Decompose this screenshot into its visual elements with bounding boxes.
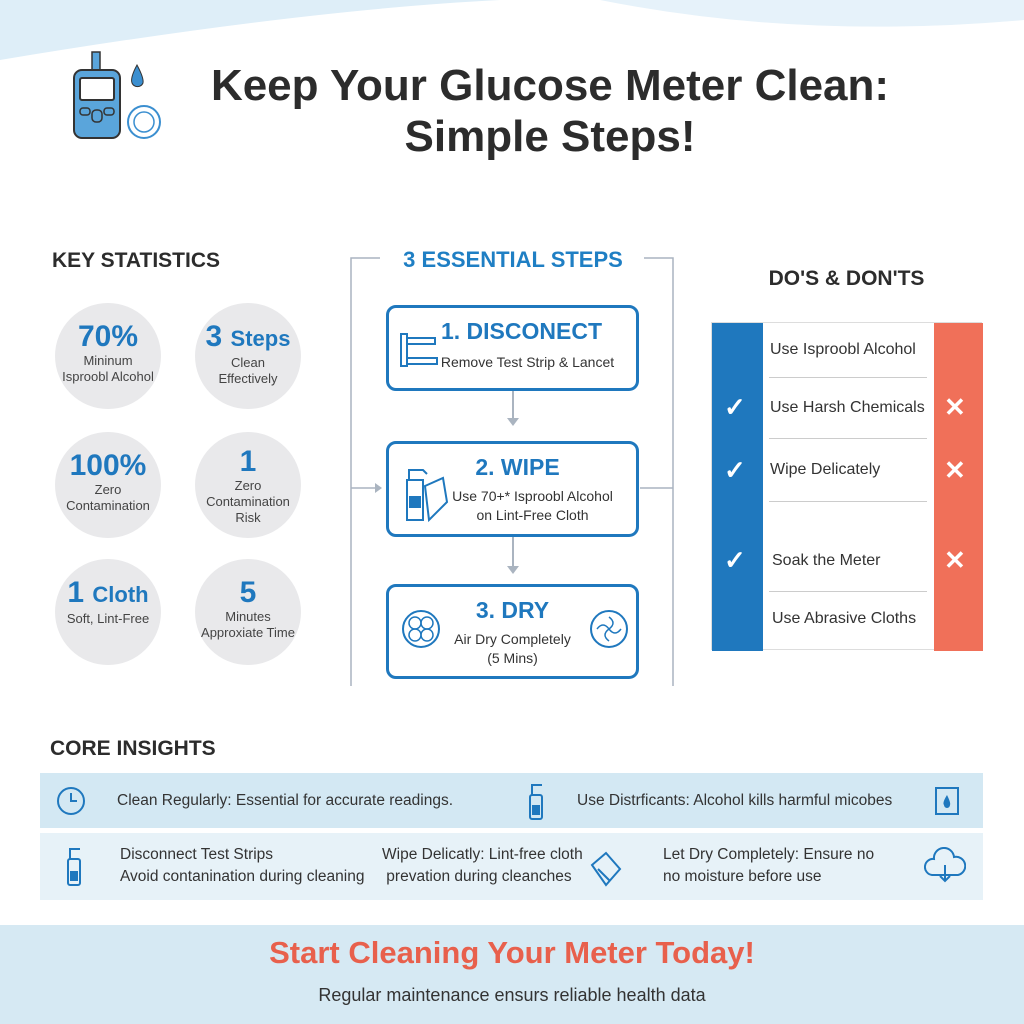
panel: core insights row 1: Clean Regularly: Essential for accurate readings. xyxy=(117,792,453,809)
panel: core insights row 2: Disconnect Test Strips xyxy=(120,846,273,863)
stat 70%: Isproobl Alcohol xyxy=(62,369,154,384)
stat 3 steps: 3 Steps xyxy=(206,320,290,353)
panel: core insights row 2: no moisture before use xyxy=(663,868,822,885)
icon: swirl xyxy=(590,610,628,648)
text: Use Isproobl Alcohol xyxy=(770,341,916,358)
step 2: 2. WIPE xyxy=(475,454,560,480)
panel: statistics circles xyxy=(55,303,301,665)
panel: core insights row 2: Let Dry Completely: Ensure no xyxy=(663,846,874,863)
step 2: on Lint-Free Cloth xyxy=(476,507,589,523)
heading: key statistics: KEY STATISTICS xyxy=(52,249,220,272)
text: ✓ xyxy=(724,545,746,575)
icon: wipe pack xyxy=(935,787,959,815)
panel: core insights row 2: Avoid contanination during cleaning xyxy=(120,868,364,885)
panel: core insights row 2: prevation during cleanches xyxy=(386,868,572,885)
stat 3 steps xyxy=(195,303,301,409)
stat 70%: 70% xyxy=(78,320,138,353)
stat 100%: Contamination xyxy=(66,498,150,513)
icon: spray bottle xyxy=(406,469,448,522)
text: ✓ xyxy=(724,455,746,485)
heading: 3 essential steps: 3 ESSENTIAL STEPS xyxy=(403,247,623,272)
stat 1 risk xyxy=(195,432,301,538)
stat 1 risk: Contamination xyxy=(206,494,290,509)
text: ✓ xyxy=(724,392,746,422)
stat 70%: Mininum xyxy=(83,353,133,368)
panel: core insights row 2 xyxy=(40,833,983,900)
stat 1 risk: Risk xyxy=(235,510,261,525)
text: Use Harsh Chemicals xyxy=(770,399,925,416)
background wave xyxy=(0,0,1024,60)
icon: clock xyxy=(57,787,85,815)
stat 5 minutes: Minutes xyxy=(225,609,271,624)
text: ✕ xyxy=(944,392,966,422)
stat 3 steps: Effectively xyxy=(218,371,278,386)
icon: cloud xyxy=(924,847,966,882)
stat 5 minutes: Approxiate Time xyxy=(201,625,295,640)
stat 70% xyxy=(55,303,161,409)
footer band xyxy=(0,925,1024,1024)
icon: cloth xyxy=(590,852,622,887)
stat 1 cloth: Soft, Lint-Free xyxy=(67,611,149,626)
stat 1 cloth: 1 Cloth xyxy=(67,576,149,609)
stat 100%: 100% xyxy=(70,449,146,482)
step 2 xyxy=(386,441,639,537)
step 3 xyxy=(386,584,639,679)
icon: fan xyxy=(402,610,440,648)
call to action: Start Cleaning Your Meter Today! xyxy=(269,935,755,970)
panel: core insights row 2: Wipe Delicatly: Lint-free cloth xyxy=(382,846,583,863)
step 3: Air Dry Completely xyxy=(454,631,571,647)
panel: 3 essential steps xyxy=(350,257,674,686)
panel: core insights row 1 xyxy=(40,773,983,828)
icon: glucose meter xyxy=(73,51,161,139)
stat 1 risk: 1 xyxy=(240,445,256,478)
step 1: 1. DISCONECT xyxy=(441,318,602,344)
text: Soak the Meter xyxy=(772,552,880,569)
step 3: (5 Mins) xyxy=(487,650,538,666)
stat 100% xyxy=(55,432,161,538)
stat 5 minutes: 5 xyxy=(240,576,256,609)
step 1 xyxy=(386,305,639,391)
step 2: Use 70+* Isproobl Alcohol xyxy=(452,488,613,504)
heading: core insights: CORE INSIGHTS xyxy=(50,737,216,760)
stat 5 minutes xyxy=(195,559,301,665)
title xyxy=(211,61,889,161)
icon: spray bottle xyxy=(67,848,81,886)
icon: spray xyxy=(529,784,543,820)
title: Simple Steps! xyxy=(405,112,695,161)
text: ✕ xyxy=(944,545,966,575)
step 3: 3. DRY xyxy=(476,597,549,623)
heading: do's and don'ts: DO'S & DON'TS xyxy=(769,267,924,290)
stat 100%: Zero xyxy=(95,482,121,497)
panel: core insights row 1: Use Distrficants: Alcohol kills harmful micobes xyxy=(577,792,892,809)
stat 1 cloth xyxy=(55,559,161,665)
title: Keep Your Glucose Meter Clean: xyxy=(211,61,889,110)
icon: strips xyxy=(400,333,438,367)
panel: do's and don'ts table xyxy=(711,322,982,650)
stat 1 risk: Zero xyxy=(235,478,261,493)
stat 3 steps: Clean xyxy=(231,355,265,370)
step 1: Remove Test Strip & Lancet xyxy=(441,354,614,370)
text: Use Abrasive Cloths xyxy=(772,610,916,627)
text: ✕ xyxy=(944,455,966,485)
footer subtitle: Regular maintenance ensurs reliable health data xyxy=(318,985,706,1005)
text: Wipe Delicately xyxy=(770,461,880,478)
